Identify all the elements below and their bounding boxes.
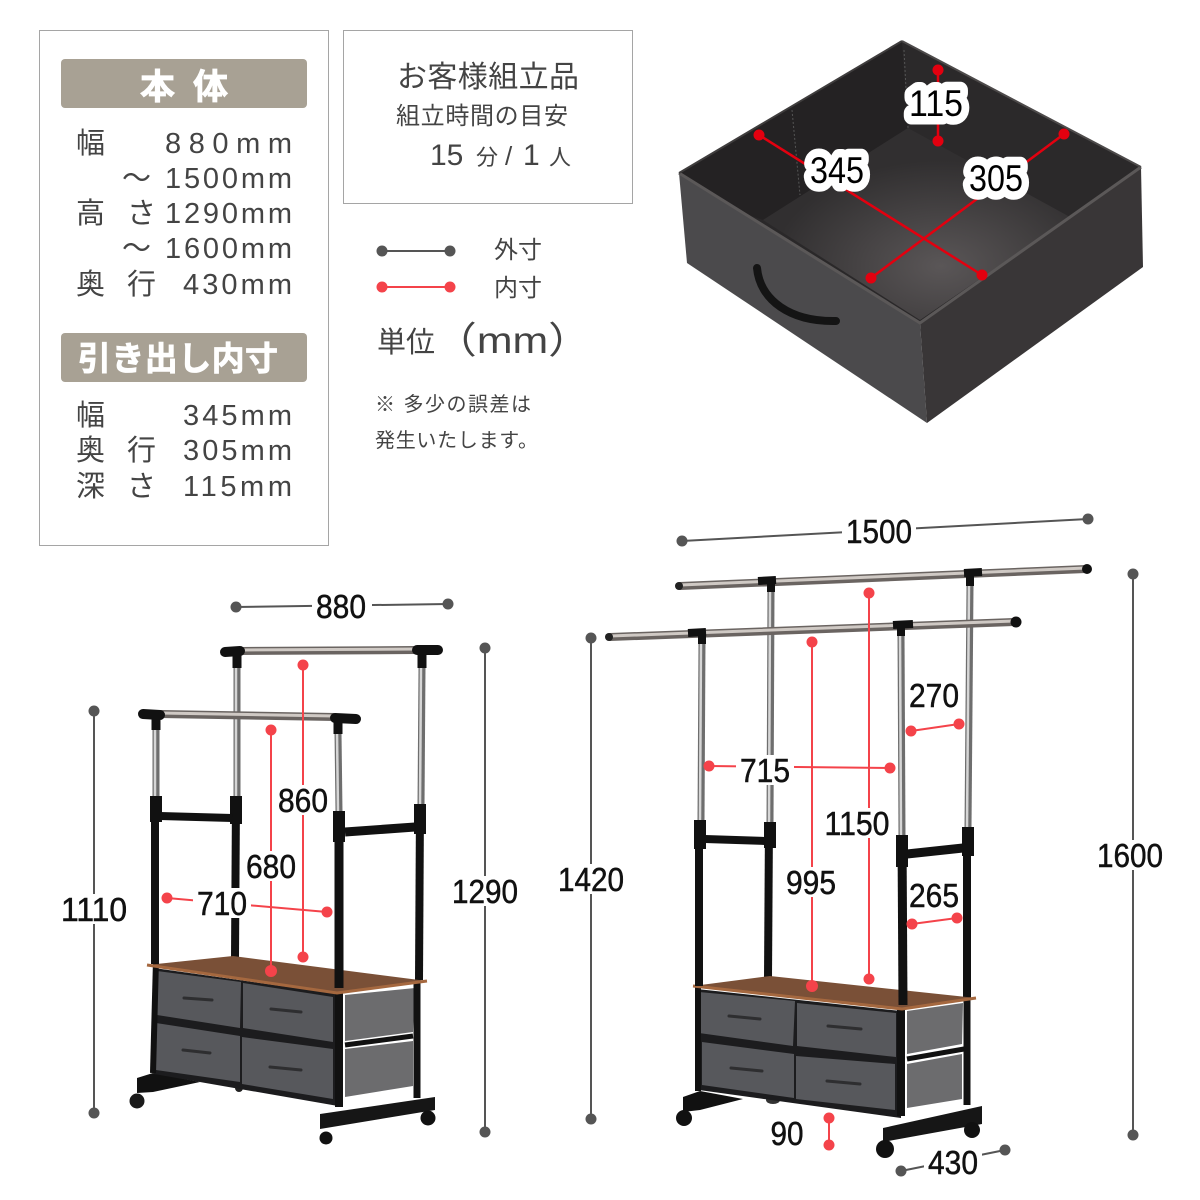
dimension: drawer height 115 [909,64,963,146]
text block: drawer dimensions: 深 [76,471,105,503]
dimension: 270 upper depth [906,677,964,736]
text block: body dimensions: さ [127,198,156,230]
dimension: drawer depth 305 [866,128,1070,284]
back posts [235,668,422,980]
text block: body dimensions: ～ [122,163,151,195]
dimension: 1150 inner height [820,588,894,984]
dimension: 715 inner width: 715 [740,752,790,789]
rear side of storage [345,980,417,1098]
panel: assembly information: お客様組立品 [397,61,579,94]
cross bars [705,839,963,854]
heading: main body: 本 [140,68,175,107]
text block: drawer dimensions: 305mm [183,435,292,467]
dimension: 680 inner height [242,724,300,977]
legend: outer and inner dimensions [376,237,542,302]
text block: drawer dimensions: 345mm [183,400,292,432]
dimension: 1420 outer height [554,632,628,1124]
dimension: drawer height 115: 115 [909,83,963,124]
text block: drawer dimensions: 幅 [76,399,105,432]
product: rack at minimum width [130,649,438,1144]
icon: drawer handle [757,268,836,321]
legend item: inner dimension: 内寸 [494,275,542,302]
dimension: 860 inner height [274,660,332,962]
drawers [697,989,901,1118]
panel: assembly information: 組立時間の目安 [396,103,568,130]
text block: body dimensions: 430mm [183,269,292,301]
dimension: 880 outer width: 880 [316,588,366,625]
back posts [768,586,970,998]
dimension: drawer depth 305: 305 [969,158,1023,199]
dimension: 860 inner height: 860 [278,782,328,819]
text block: body dimensions: ～ [122,233,151,265]
dimension: 1600 outer height: 1600 [1097,837,1163,874]
legend item: outer dimension: 外寸 [494,237,542,264]
text block: drawer dimensions: さ [127,471,156,503]
back rail [225,649,438,668]
dimension: 715 inner width [704,752,896,789]
panel: assembly information: 15 [430,139,463,172]
dimension: 265 lower depth: 265 [909,877,959,914]
text: unit [377,320,591,361]
dimension: 430 depth: 430 [928,1144,978,1181]
product: rack at maximum width [605,564,1092,1158]
dimension: 265 lower depth [906,877,962,930]
dimension: 1600 outer height [1093,568,1167,1140]
text block: body dimensions: 1290mm [165,198,292,230]
dimension: 1110 outer height [57,706,131,1118]
text block: body dimensions: 1500mm [165,163,292,195]
text block: drawer dimensions: 行 [127,434,156,467]
panel: main body specifications [40,30,328,546]
dimension: 270 upper depth: 270 [909,677,959,714]
panel: assembly information: / [505,141,513,171]
front posts upper [699,632,903,1005]
dimension: 1110 outer height: 1110 [61,891,127,928]
text block: body dimensions: 行 [127,268,156,301]
heading: drawer inner dimensions: 引き出し内寸 [78,340,278,377]
dimension: 995 inner height: 995 [786,864,836,901]
dimension: 1420 outer height: 1420 [558,861,624,898]
text: tolerance note: 発生いたします。 [375,429,538,452]
dimension: 430 depth [896,1144,1010,1181]
dimension: 710 inner width: 710 [197,885,247,922]
dimension: 680 inner height: 680 [246,848,296,885]
front rail [605,616,1022,644]
dimension: 1290 outer height: 1290 [452,873,518,910]
front rail [143,713,356,734]
panel: assembly information: 人 [549,145,571,170]
dimension: 1290 outer height [448,642,522,1138]
heading: main body [61,59,307,108]
base and casters [676,1091,982,1158]
dimension: 880 outer width [230,588,454,625]
rear side of storage [907,996,967,1108]
drawers [154,968,338,1106]
legend item: outer dimension [376,237,542,264]
dimension: 710 inner width [162,885,332,922]
drawer photo with inner dimensions [679,41,1143,423]
text block: body dimensions: 幅 [76,127,105,160]
wooden shelf [147,956,427,993]
text block: drawer dimensions: 奥 [76,434,105,467]
text block: body dimensions: 1600mm [165,233,292,265]
text: tolerance note [375,393,538,452]
text: tolerance note: ※ 多少の誤差は [375,393,531,416]
text block: body dimensions [76,127,292,301]
text: unit: 単位 [377,326,435,359]
heading: drawer inner dimensions [61,333,307,382]
dimension: 995 inner height [782,636,840,992]
text block: body dimensions: 奥 [76,268,105,301]
text: unit: （mm） [434,320,591,361]
dimension: 1150 inner height: 1150 [824,805,890,842]
base and casters [130,1073,436,1144]
front posts upper [155,728,339,988]
dimension: 90 clearance [770,1112,834,1152]
back rail [675,564,1092,592]
text block: drawer dimensions [76,399,292,503]
dimension: 90 clearance: 90 [770,1115,804,1152]
heading: main body: 体 [193,68,228,107]
cross bars [160,816,415,832]
legend item: inner dimension [376,275,542,302]
text block: drawer dimensions: 115mm [183,471,292,503]
panel: assembly information: 1 [523,139,540,172]
dimension: drawer width 345 [754,130,988,280]
text block: body dimensions: 高 [76,197,105,230]
text block: body dimensions: 880mm [165,128,292,160]
wooden shelf [693,976,976,1009]
front posts lower [698,986,901,1116]
dimension: 1500 outer width [676,513,1094,550]
panel: assembly information: 分 [476,145,498,170]
front posts [153,960,339,1107]
dimension: drawer width 345: 345 [810,150,864,191]
dimension: 1500 outer width: 1500 [846,513,912,550]
panel: assembly information [344,30,632,204]
